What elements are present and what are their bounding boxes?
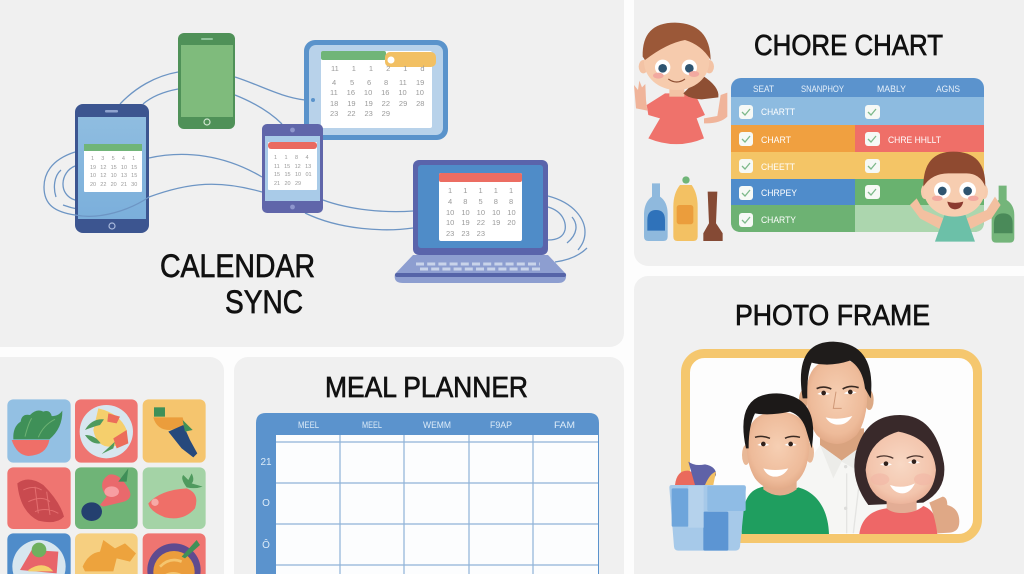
icon: tablet with calendar: 11 1 1 2 1 d <box>331 64 425 73</box>
planner row markers: O <box>262 498 270 509</box>
table header labels: AGNS <box>936 84 960 94</box>
icon: small tablet with calendar: 15 15 10 01 <box>274 172 312 178</box>
heading: sync: SYNC <box>225 284 303 320</box>
row labels: CHARTT <box>761 107 795 118</box>
icon: laptop with calendar: 1 1 1 1 1 <box>448 186 513 195</box>
food tile: plate with pasta <box>7 533 71 574</box>
planner day headers <box>298 420 575 430</box>
panel: photo frame <box>634 276 1024 574</box>
planner day headers: F9AP <box>490 420 512 430</box>
planner row markers: 21 <box>260 457 272 468</box>
icon: laptop with calendar: 4 8 5 8 8 <box>448 197 513 206</box>
table header labels: MABLY <box>877 84 906 94</box>
icon: blue phone with calendar: 1 3 5 4 1 <box>91 156 135 162</box>
planner row markers: Ô <box>262 538 270 551</box>
planner day headers: MEEL <box>362 420 382 430</box>
food tile: radishes <box>75 467 138 529</box>
food tile: chips <box>75 533 138 574</box>
family portrait <box>742 342 959 534</box>
icon: small tablet with calendar: 11 15 12 13 <box>274 164 311 170</box>
row labels <box>761 107 941 226</box>
sync connection curves <box>44 72 587 262</box>
chore table <box>731 78 984 232</box>
icon: laptop with calendar <box>395 160 566 283</box>
row labels: CHRE HHLLT <box>888 135 941 146</box>
icon: tablet with calendar <box>304 40 448 140</box>
heading: calendar: CALENDAR <box>160 248 315 284</box>
icon: tablet with calendar: 11 16 10 16 10 10 <box>330 88 424 97</box>
panel: calendar sync <box>0 0 624 347</box>
illustration: boy cheering <box>910 152 1001 242</box>
planner day headers: FAM <box>554 420 575 430</box>
icon: laptop with calendar: 10 19 22 19 20 <box>446 218 516 227</box>
photo frame border <box>686 354 978 538</box>
table header labels <box>753 84 960 94</box>
icon: tablet with calendar: 23 22 23 29 <box>330 109 390 118</box>
illustration: girl waving <box>634 23 727 144</box>
food tile: soup bowl <box>143 533 206 574</box>
row labels: CHART <box>761 135 791 146</box>
icon: tablet with calendar: 11 <box>399 78 407 87</box>
icon: small tablet with calendar: 21 20 29 <box>274 181 301 187</box>
heading: photo frame: PHOTO FRAME <box>735 300 930 332</box>
planner grid <box>256 413 599 574</box>
icon: laptop with calendar: 23 23 23 <box>446 229 485 238</box>
food tile: tomato <box>143 467 206 529</box>
icon: tablet with calendar: 18 19 19 22 29 28 <box>330 99 424 108</box>
check boxes <box>739 105 880 227</box>
food tile: steak <box>7 467 71 529</box>
icon: blue phone with calendar: 19 12 15 10 15 <box>90 165 137 171</box>
planner day headers: WEMM <box>423 420 451 430</box>
illustration: bottles and brush <box>644 176 1014 243</box>
icon: blue phone with calendar <box>75 104 149 233</box>
father <box>797 342 890 533</box>
icon: blue phone with calendar: 10 12 10 13 15 <box>90 173 137 179</box>
food tile: vegetables <box>143 399 206 463</box>
food tile: salad bowl <box>7 399 71 463</box>
table header labels: SNANPHOY <box>801 84 844 94</box>
icon: small tablet with calendar <box>262 124 323 213</box>
planner day headers: MEEL <box>298 420 319 430</box>
planner row markers <box>260 457 272 551</box>
row labels: CHEETT <box>761 162 795 173</box>
icon: tablet with calendar: 19 <box>416 78 424 87</box>
daughter <box>854 415 944 534</box>
icon: green phone <box>178 33 235 129</box>
icon: tablet with calendar: 5 <box>350 78 354 87</box>
icon: tablet with calendar: 6 <box>367 78 371 87</box>
heading: meal planner: MEAL PLANNER <box>325 372 528 404</box>
heading: chore chart: CHORE CHART <box>754 30 943 62</box>
panel: meal planner <box>234 357 624 574</box>
table header labels: SEAT <box>753 84 774 94</box>
panel: food grid <box>0 357 224 574</box>
icon: tablet with calendar: 8 <box>384 78 388 87</box>
icon: blue phone with calendar: 20 22 20 21 30 <box>90 182 137 188</box>
icon: laptop with calendar: 10 10 10 10 10 <box>446 208 516 217</box>
row labels: CHARTY <box>761 215 797 226</box>
father's hand <box>929 497 959 533</box>
icon: blue storage box with fruit <box>669 462 746 551</box>
row labels: CHRPEY <box>761 188 798 199</box>
panel: chore chart <box>634 0 1024 266</box>
icon: small tablet with calendar: 1 1 8 4 <box>274 155 309 161</box>
son <box>742 393 829 534</box>
icon: tablet with calendar: 4 <box>332 78 336 87</box>
food tile: plated meal <box>75 399 138 463</box>
